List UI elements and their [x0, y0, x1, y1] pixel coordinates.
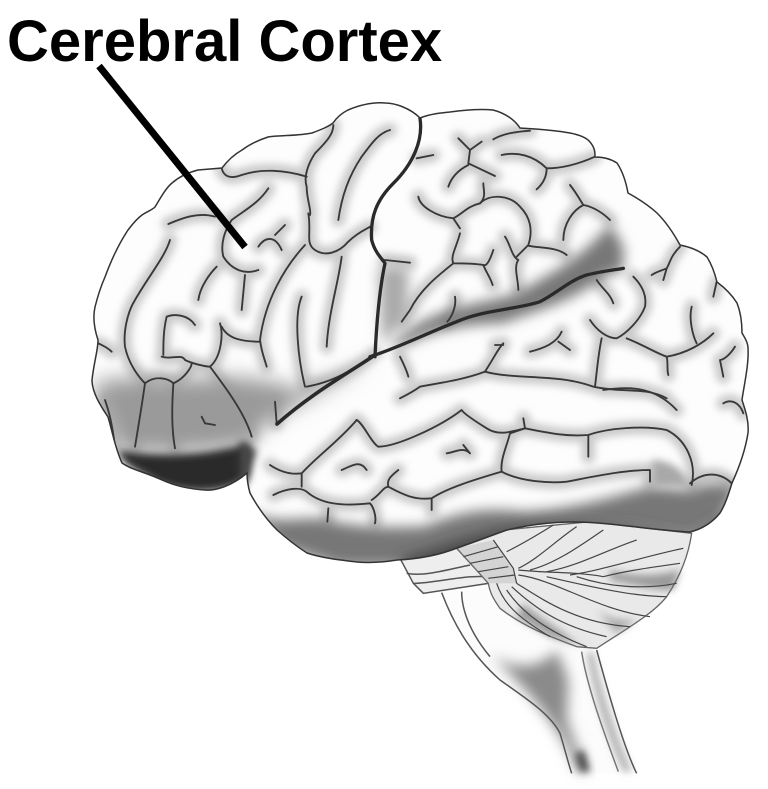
cerebellum — [457, 522, 692, 648]
title: Cerebral Cortex — [7, 9, 442, 74]
shading and sulci of the cerebrum — [92, 118, 760, 573]
cerebrum outline — [92, 103, 748, 562]
brainstem — [400, 548, 637, 773]
major fissures — [277, 118, 623, 424]
cerebrum — [92, 103, 760, 573]
leader line — [99, 66, 245, 247]
